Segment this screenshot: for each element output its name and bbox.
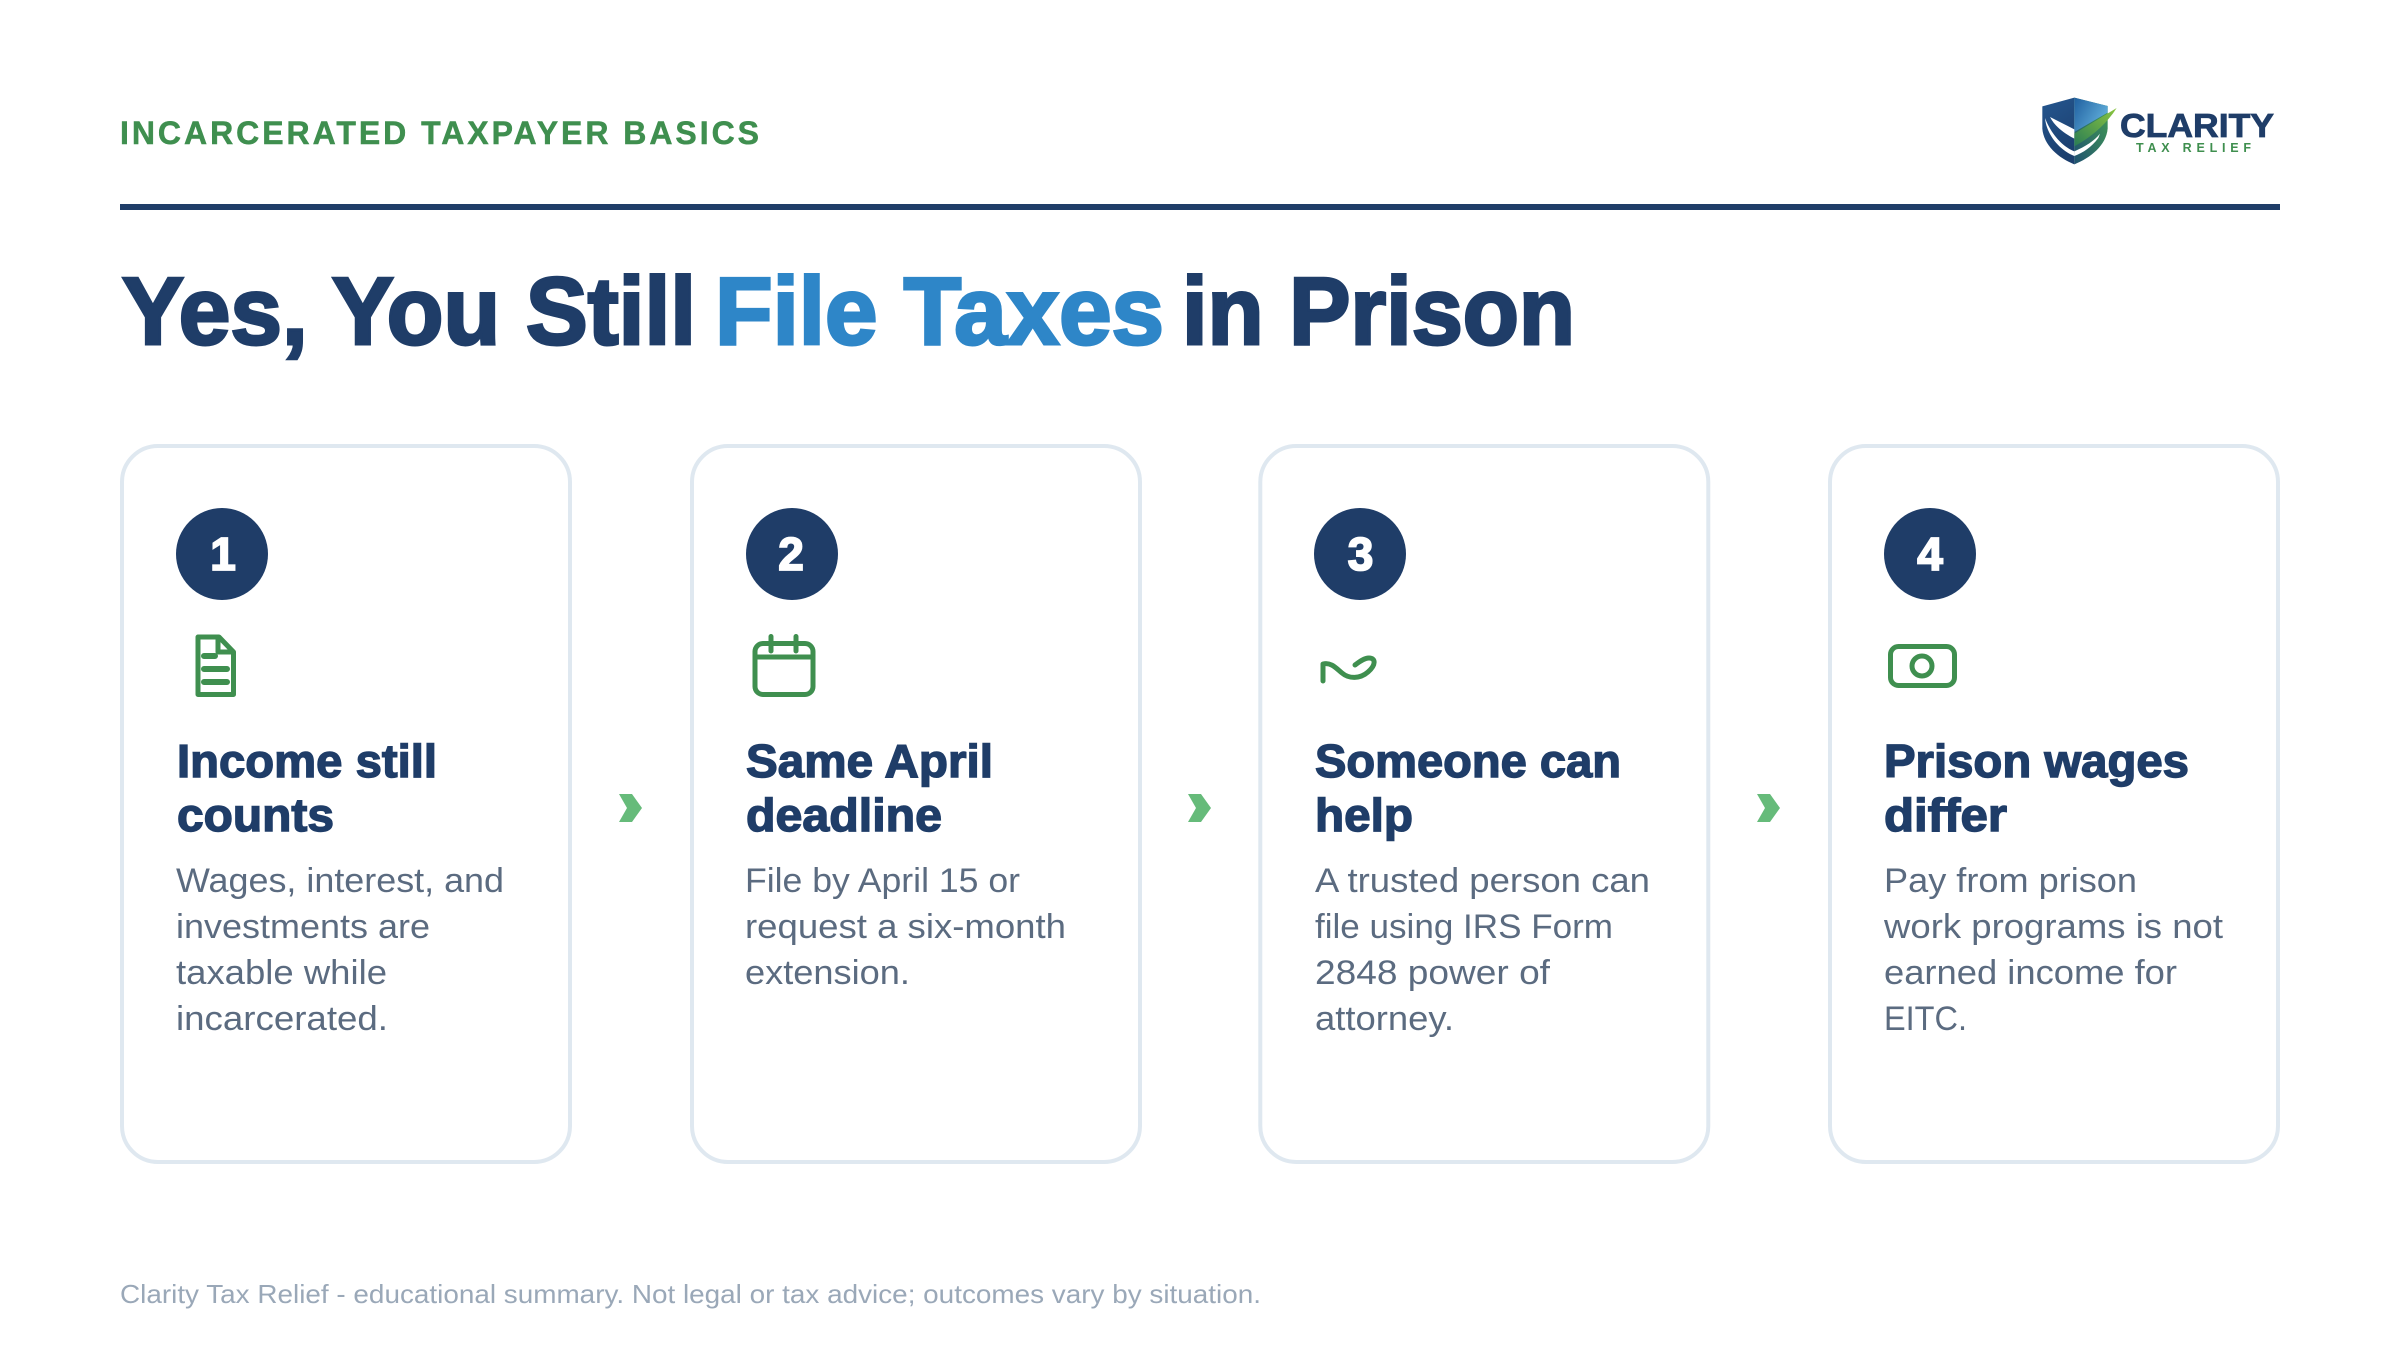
body text: File by April 15 or (745, 862, 1020, 900)
body text: 2848 power of (1315, 954, 1551, 992)
title: Yes, You Still (122, 258, 696, 365)
panel: same April deadline (692, 446, 1140, 1162)
body text (1883, 862, 2224, 1038)
heading: Same April (746, 735, 993, 787)
logo wordmark: CLARITY (2120, 107, 2274, 144)
body text: request a six-month (745, 908, 1066, 946)
heading (746, 735, 993, 841)
body text (745, 862, 1066, 992)
body text: attorney. (1315, 1000, 1454, 1038)
heading: help (1315, 789, 1413, 841)
heading: differ (1884, 789, 2007, 841)
title: in Prison (1182, 258, 1575, 365)
panel: someone can help (1260, 446, 1708, 1162)
body text (1315, 862, 1650, 1038)
body text: earned income for (1884, 954, 2177, 992)
icon: helping hand (1323, 658, 1374, 681)
body text: incarcerated. (176, 1000, 388, 1038)
logo tagline: TAX RELIEF (2136, 141, 2251, 155)
title: File Taxes (715, 258, 1164, 365)
footer disclaimer: Clarity Tax Relief - educational summary. Not legal or tax advice; outcomes vary by situation. (120, 1279, 1261, 1309)
heading: Prison wages (1884, 735, 2189, 787)
icon: calendar (755, 636, 813, 694)
body text: EITC. (1884, 1000, 1967, 1038)
step number 3 (1314, 508, 1406, 600)
heading: counts (177, 789, 334, 841)
card outline (1830, 446, 2278, 1162)
body text: A trusted person can (1315, 862, 1650, 900)
step number 3: 3 (1348, 528, 1373, 580)
step number 2 (746, 508, 838, 600)
icon: document (198, 637, 234, 694)
body text: extension. (745, 954, 910, 992)
body text (176, 862, 504, 1038)
body text: work programs is not (1883, 908, 2224, 946)
heading (1315, 735, 1621, 841)
step number 2: 2 (778, 528, 804, 580)
arrow: step 1 to 2 (619, 794, 642, 822)
card outline (692, 446, 1140, 1162)
arrow: step 2 to 3 (1188, 794, 1211, 822)
eyebrow heading: INCARCERATED TAXPAYER BASICS (120, 115, 759, 151)
icon: cash (1890, 646, 1954, 686)
heading: Income still (177, 735, 437, 787)
heading: Someone can (1315, 735, 1621, 787)
logo: Clarity Tax Relief (2042, 98, 2274, 164)
body text: investments are (176, 908, 430, 946)
body text: taxable while (176, 954, 387, 992)
heading: deadline (746, 789, 942, 841)
body text: file using IRS Form (1315, 908, 1613, 946)
title (122, 258, 1575, 365)
header rule (120, 204, 2280, 210)
icon: shield with checkmark (2042, 98, 2117, 164)
body text: Pay from prison (1884, 862, 2137, 900)
step number 1 (176, 508, 268, 600)
step number 4 (1884, 508, 1976, 600)
panel: income still counts (122, 446, 570, 1162)
step number 4: 4 (1917, 528, 1943, 580)
arrow: step 3 to 4 (1757, 794, 1780, 822)
heading (1884, 735, 2189, 841)
panel: prison wages differ (1830, 446, 2278, 1162)
heading (177, 735, 437, 841)
card outline (122, 446, 570, 1162)
body text: Wages, interest, and (176, 862, 504, 900)
card outline (1260, 446, 1708, 1162)
step number 1: 1 (210, 528, 236, 580)
